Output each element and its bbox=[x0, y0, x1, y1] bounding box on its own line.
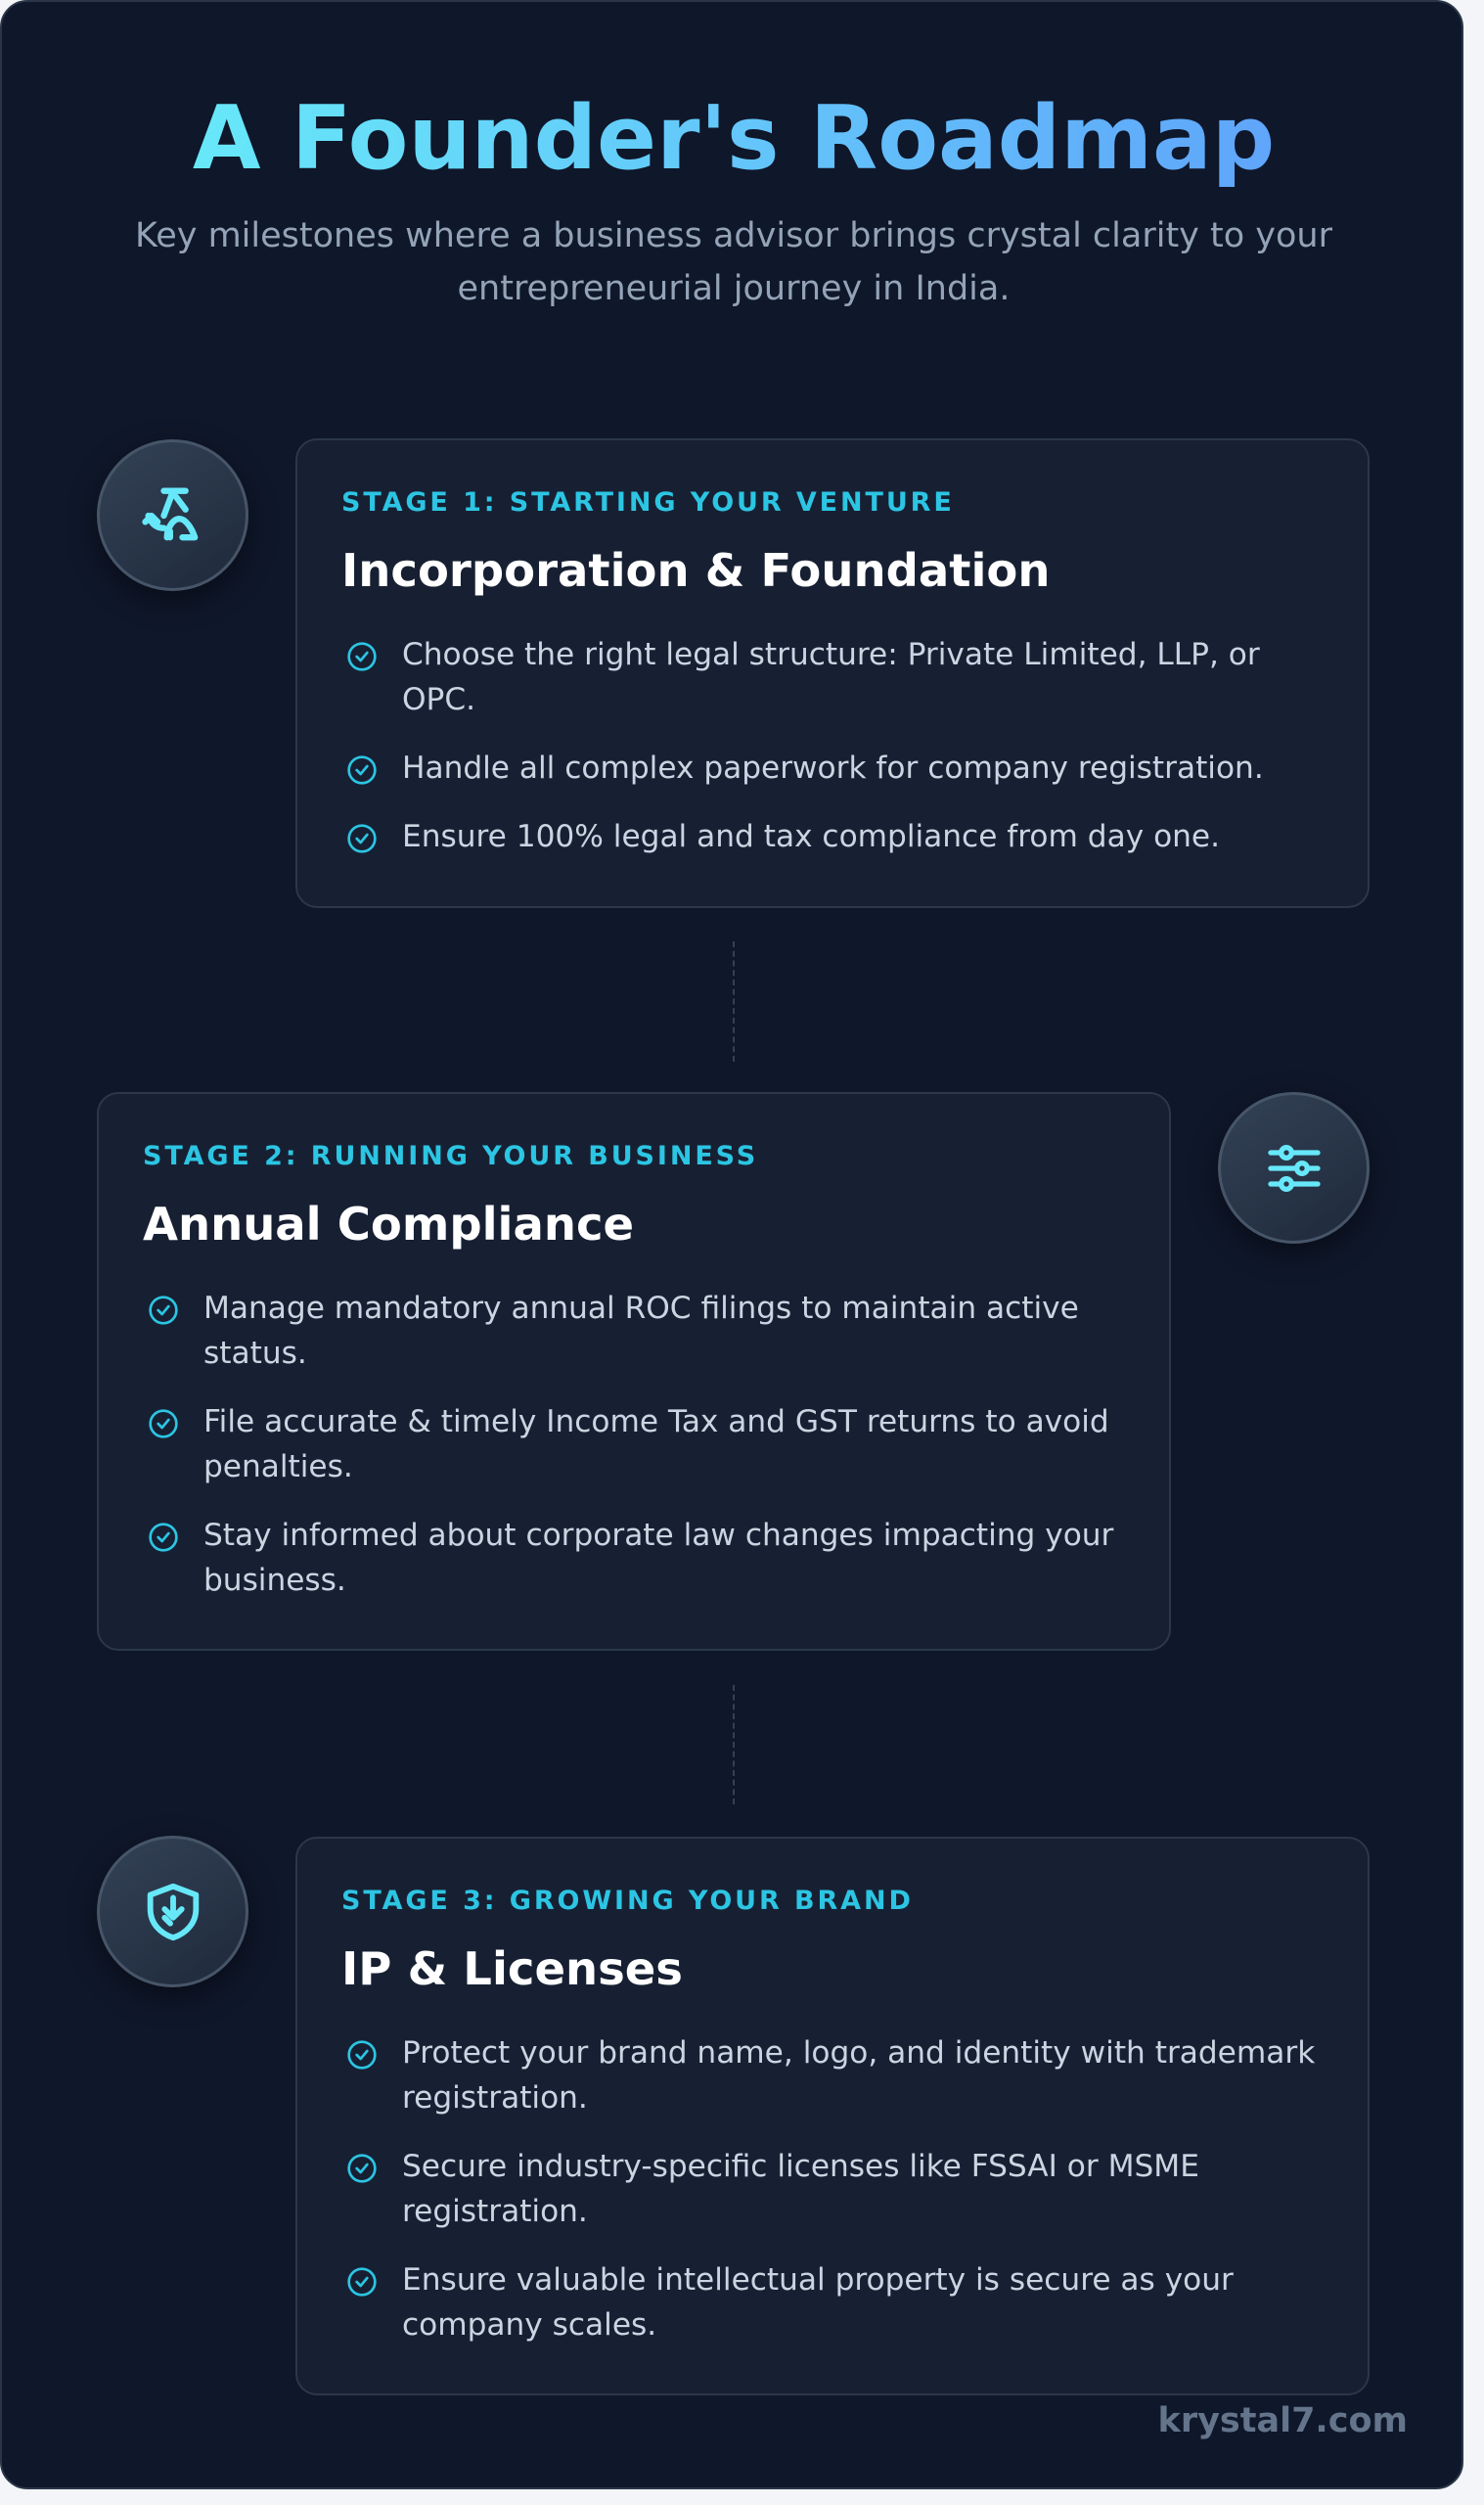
stage 3 bullets: Protect your brand name, logo, and identity with trademark registration. bbox=[402, 2035, 1315, 2116]
panel: stage 2 bbox=[97, 1092, 1171, 1651]
icon: stage 2 sliders bbox=[1218, 1092, 1370, 1244]
footer brand: krystal7.com bbox=[1158, 2401, 1408, 2440]
stage 1 bullets: Choose the right legal structure: Private Limited, LLP, or OPC. bbox=[402, 637, 1260, 717]
stage 1 bullets: Ensure 100% legal and tax compliance from day one. bbox=[402, 819, 1220, 854]
icon: stage 1 incorporation bbox=[97, 439, 248, 591]
icon: stage 3 shield bbox=[97, 1836, 248, 1987]
stage 1 heading: Incorporation & Foundation bbox=[341, 544, 1050, 597]
panel: stage 1 bbox=[295, 438, 1370, 908]
stage 2 bullets: Stay informed about corporate law changes impacting your business. bbox=[203, 1518, 1113, 1598]
stage 1 label: STAGE 1: STARTING YOUR VENTURE bbox=[341, 487, 955, 518]
stage 2 label: STAGE 2: RUNNING YOUR BUSINESS bbox=[143, 1141, 758, 1171]
stage 3 bullets: Secure industry-specific licenses like FSSAI or MSME registration. bbox=[402, 2149, 1199, 2229]
stage 3 bullets: Ensure valuable intellectual property is secure as your company scales. bbox=[402, 2262, 1234, 2343]
connector 1 bbox=[733, 941, 735, 1062]
title: A Founder's Roadmap bbox=[193, 87, 1275, 190]
panel: stage 3 bbox=[295, 1837, 1370, 2395]
stage 1 bullets: Handle all complex paperwork for company registration. bbox=[402, 751, 1264, 786]
stage 3 heading: IP & Licenses bbox=[341, 1942, 683, 1995]
stage 3 bullets bbox=[347, 2035, 1315, 2343]
stage 2 bullets bbox=[149, 1291, 1113, 1598]
subtitle: Key milestones where a business advisor brings crystal clarity to your entrepreneurial journey in India. bbox=[135, 216, 1332, 308]
stage 2 bullets: Manage mandatory annual ROC filings to maintain active status. bbox=[203, 1291, 1079, 1371]
stage 2 heading: Annual Compliance bbox=[143, 1198, 634, 1251]
stage 1 bullets bbox=[347, 637, 1264, 854]
stage 2 bullets: File accurate & timely Income Tax and GST returns to avoid penalties. bbox=[203, 1404, 1109, 1484]
connector 2 bbox=[733, 1685, 735, 1804]
stage 3 label: STAGE 3: GROWING YOUR BRAND bbox=[341, 1886, 914, 1916]
